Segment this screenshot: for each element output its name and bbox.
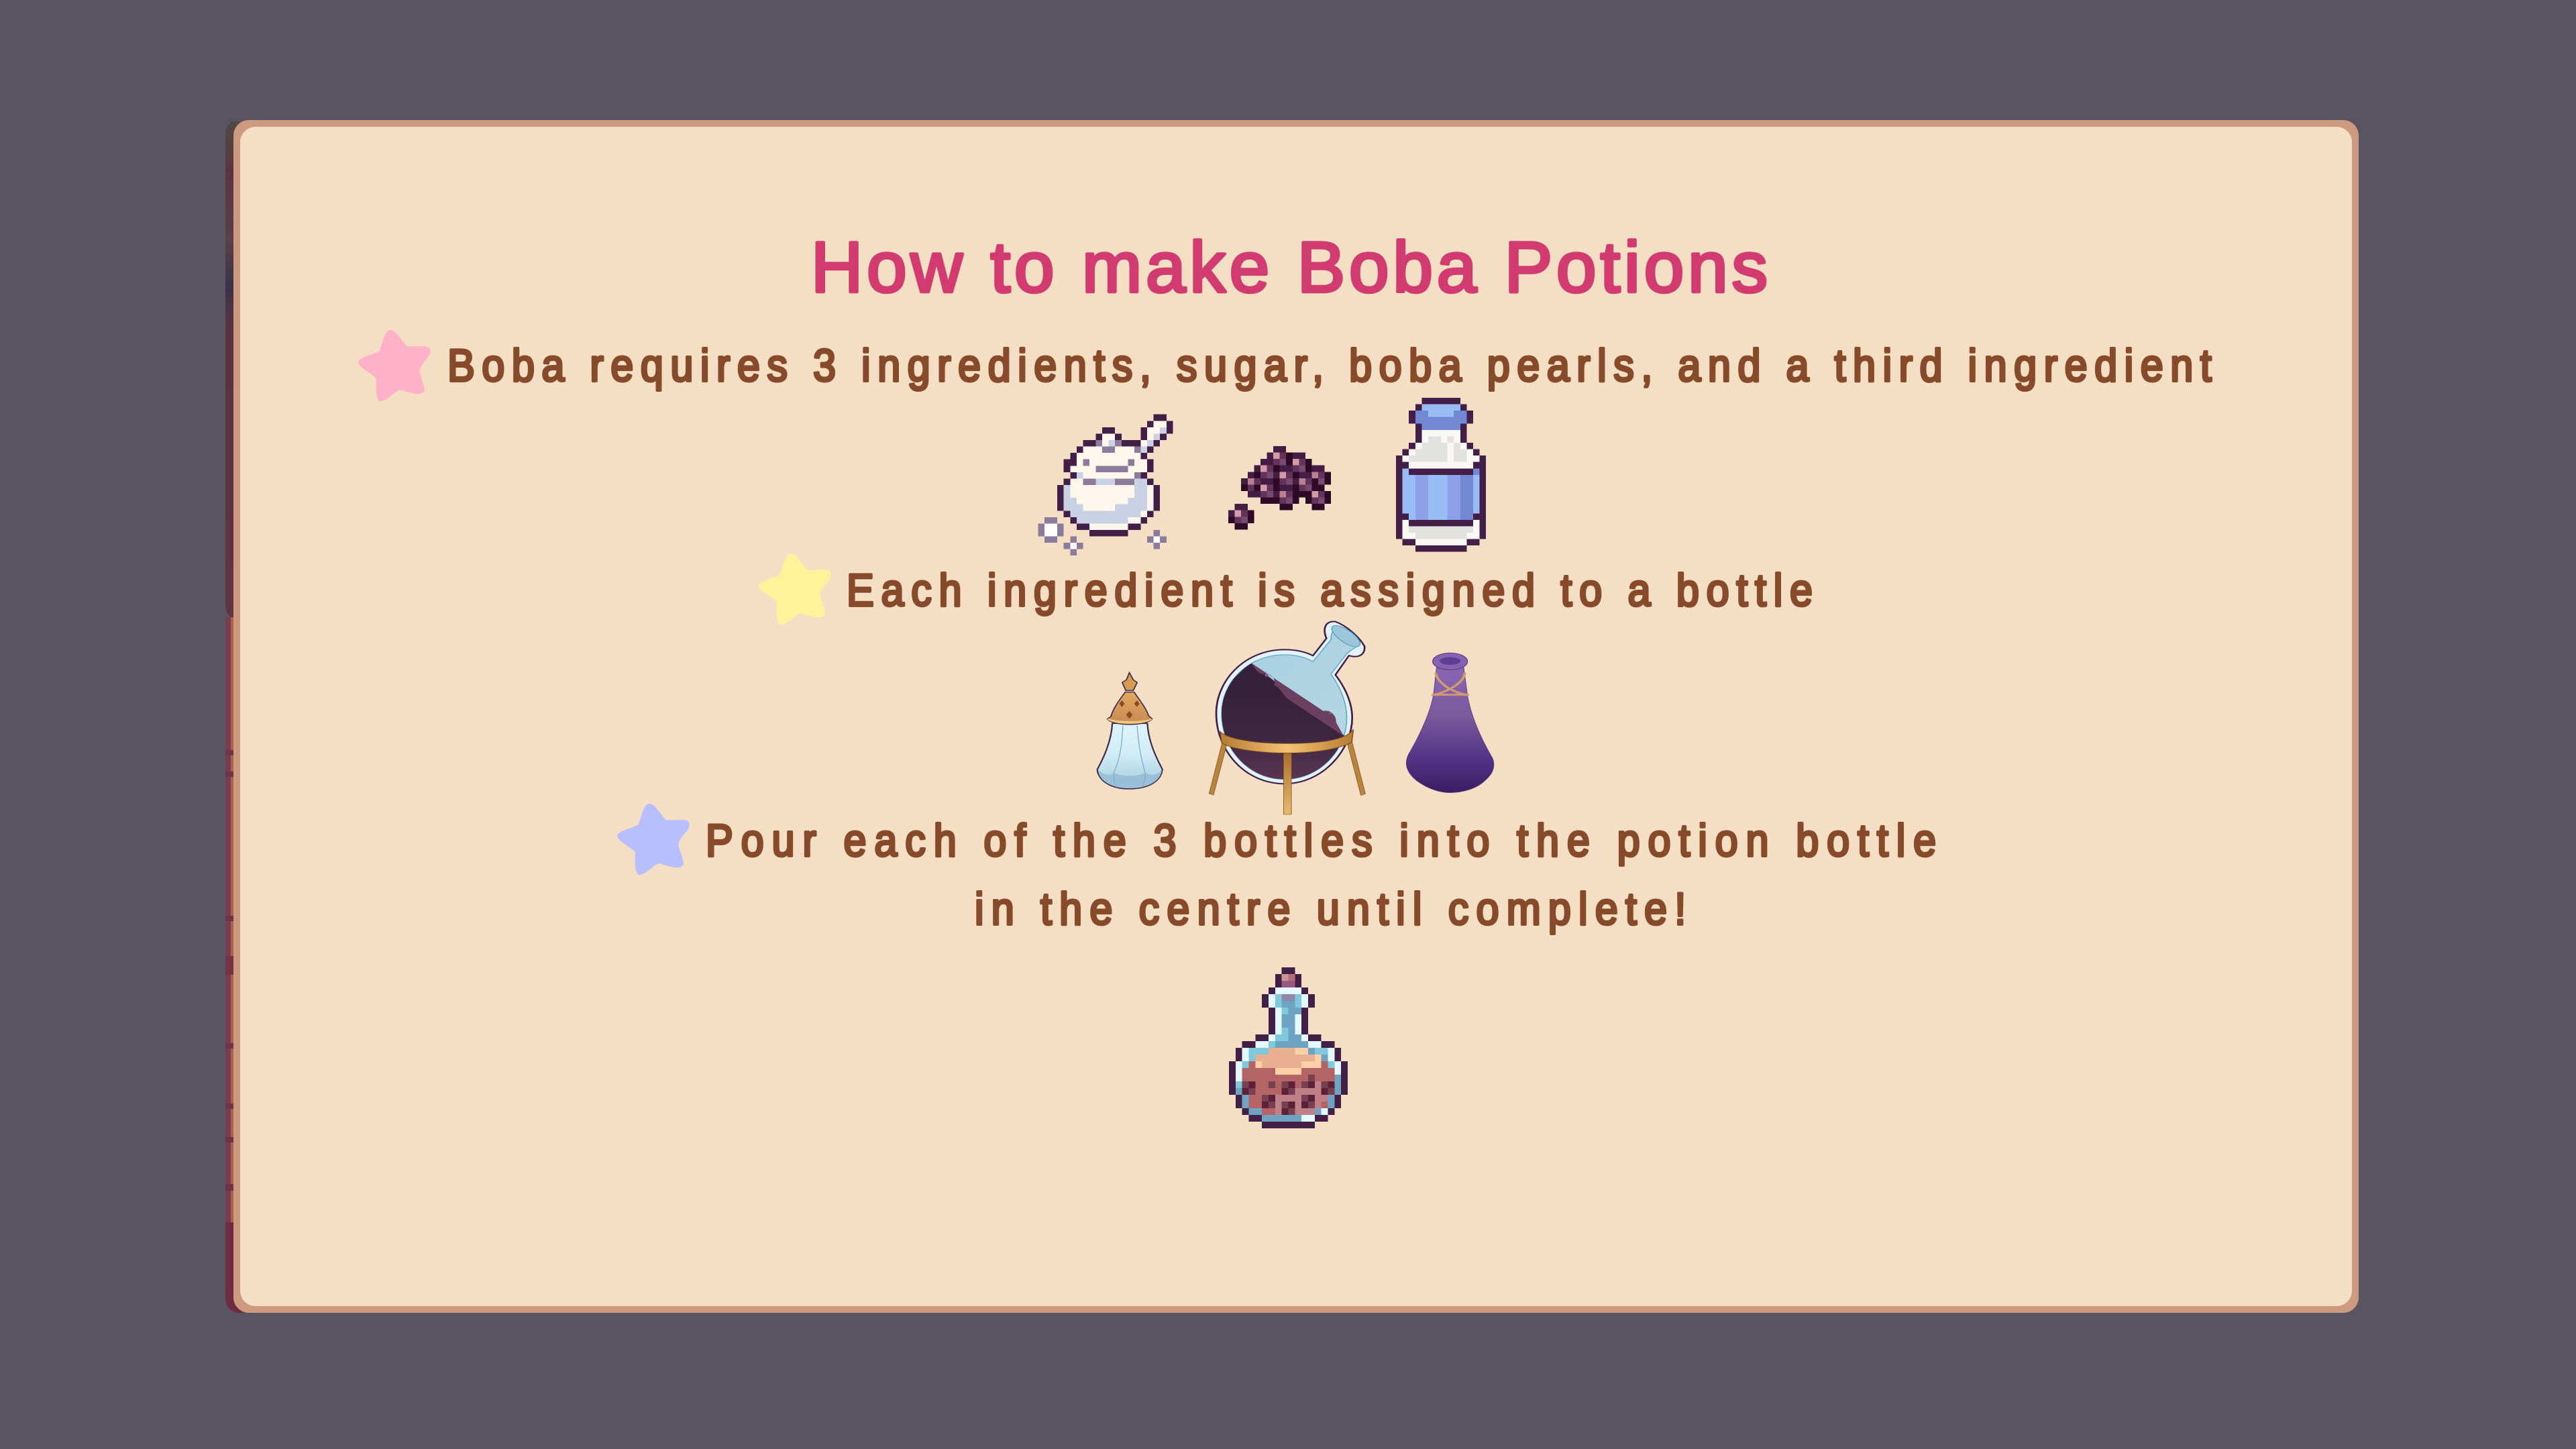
icon: pink star [358,330,431,401]
step 1 text: Boba requires 3 ingredients, sugar, boba pearls, and a third ingredient [447,339,2212,391]
icon: salt shaker bottle [1097,673,1163,789]
step 3 text: Pour each of the 3 bottles into the potion bottle [706,814,1936,866]
step 3 text [706,814,1936,934]
infographic scene [225,120,2359,1313]
panel: recipe card [233,120,2359,1313]
step 3 text: in the centre until complete! [975,883,1686,934]
icon: sugar bowl [1038,417,1173,552]
title: How to make Boba Potions [811,227,1768,307]
icon: milk bottle [1396,401,1486,549]
left edge strip behind card [225,121,248,1313]
icon: central flask on stand [1209,621,1365,814]
icon: yellow star [759,553,831,625]
icon: purple vase [1406,653,1494,793]
icon: boba potion [1229,971,1348,1125]
icon: periwinkle star [617,804,690,875]
icon: boba pearls [1228,449,1331,527]
step 2 text: Each ingredient is assigned to a bottle [847,564,1813,616]
